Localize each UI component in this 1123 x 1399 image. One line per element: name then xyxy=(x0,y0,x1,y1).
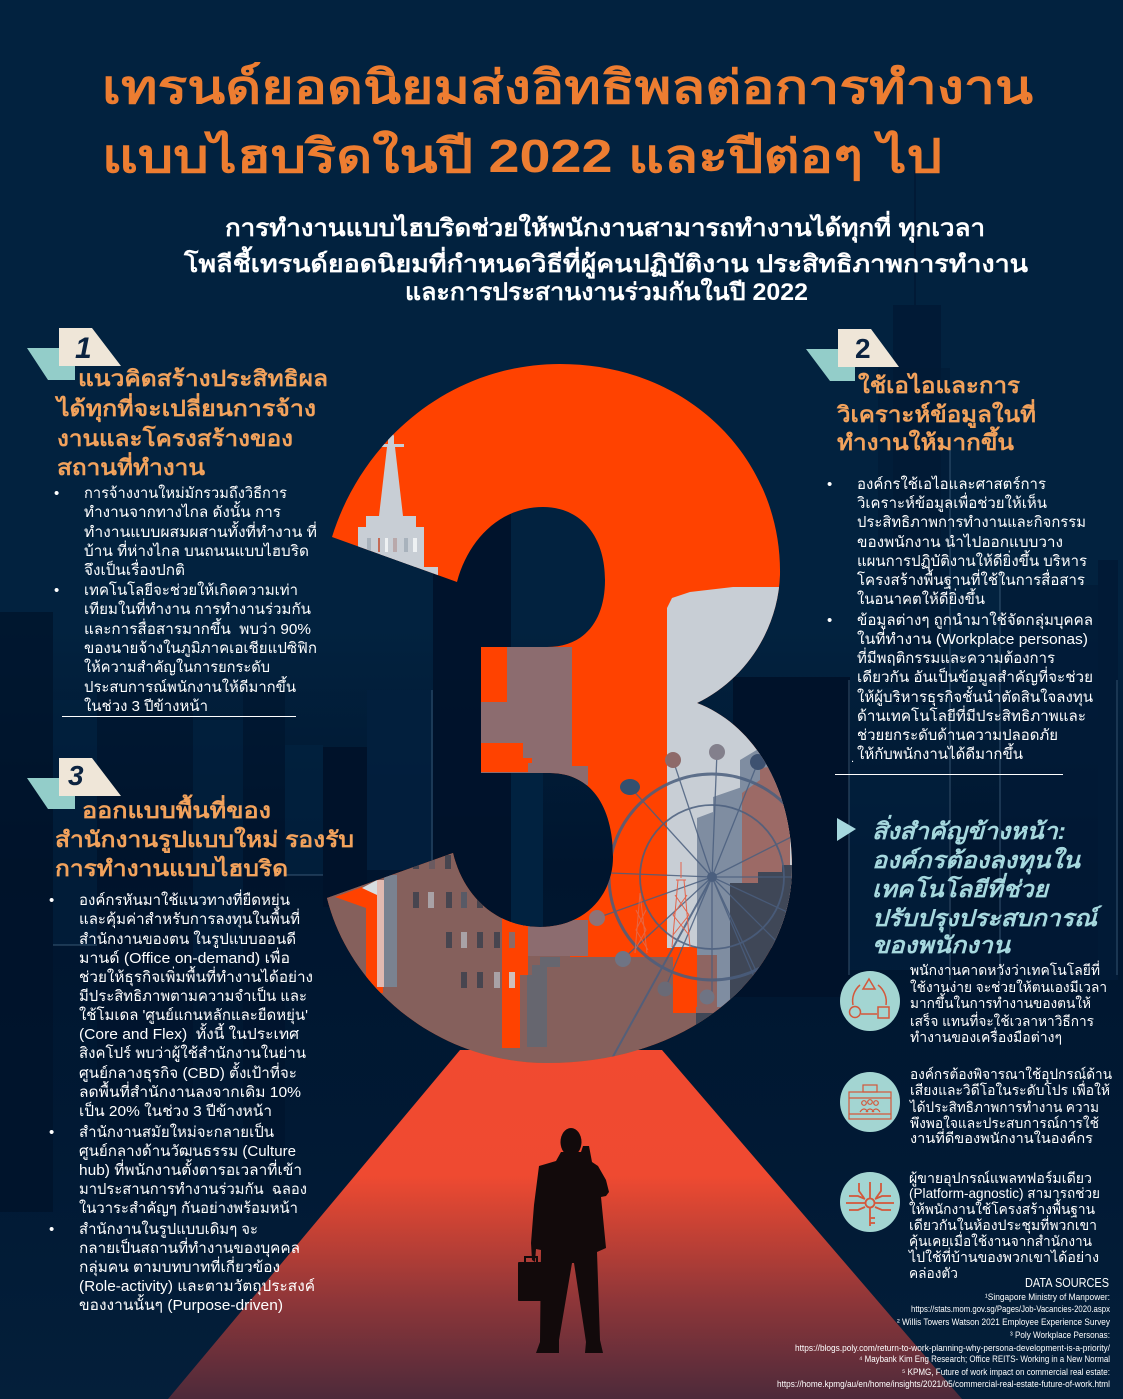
subtitle: การทำงานแบบไฮบริดช่วยให้พนักงานสามารถทำงานได้ทุกที่ ทุกเวลา xyxy=(225,210,985,244)
body text 2: . xyxy=(851,753,854,765)
right side buildings xyxy=(697,787,742,1010)
badge 1: 1 xyxy=(75,332,92,365)
tech text 1 xyxy=(910,961,1107,1045)
tech text 1: ทำงานของเครื่องมือต่างๆ xyxy=(910,1028,1062,1045)
data sources: ¹Singapore Ministry of Manpower: xyxy=(985,1292,1110,1302)
body text 3: ในวาระสำคัญๆ กันอย่างพร้อมหน้า xyxy=(79,1199,298,1217)
silhouette: businessman with briefcase xyxy=(518,1128,609,1353)
what's next heading: สิ่งสำคัญข้างหน้า: xyxy=(872,814,1066,845)
body text 3: มานด์ (Office on-demand) เพื่อ xyxy=(79,947,290,967)
body text 2: ช่วยยกระดับด้านความปลอดภัย xyxy=(857,727,1058,744)
body text 1: ทำงานจากทางไกล ดังนั้น การ xyxy=(84,501,281,521)
tech text 1: เสร็จ แทนที่จะใช้เวลาหาวิธีการ xyxy=(910,1012,1094,1029)
body text 2: องค์กรใช้เอไอและศาสตร์การ xyxy=(857,475,1046,493)
grey building right xyxy=(667,587,800,948)
tech text 1: มากขึ้นในการทำงานของตนให้ xyxy=(910,993,1091,1011)
body text 1: จึงเป็นเรื่องปกติ xyxy=(84,559,185,579)
badge 2 xyxy=(806,329,899,381)
data sources: DATA SOURCES xyxy=(1025,1276,1109,1290)
windows xyxy=(413,855,515,988)
what's next heading: เทคโนโลยีที่ช่วย xyxy=(872,872,1051,902)
body text 3: • xyxy=(49,892,54,909)
tech text 2: องค์กรต้องพิจารณาใช้อุปกรณ์ด้าน xyxy=(910,1066,1112,1083)
data sources: ³ Poly Workplace Personas: xyxy=(1010,1330,1110,1340)
big number 3 with city xyxy=(320,360,815,1073)
background skyline xyxy=(0,170,1118,1212)
body text 2: ด้านเทคโนโลยีที่มีประสิทธิภาพและ xyxy=(857,705,1086,725)
body text 3: สำนักงานในรูปแบบเดิมๆ จะ xyxy=(79,1220,258,1238)
heading 1: ได้ทุกที่จะเปลี่ยนการจ้าง xyxy=(55,392,316,423)
body text 3: (Role-activity) และตามวัตถุประสงค์ xyxy=(79,1278,315,1296)
heading 1 xyxy=(55,366,328,480)
what's next heading: ของพนักงาน xyxy=(872,932,1011,958)
title: เทรนด์ยอดนิยมส่งอิทธิพลต่อการทำงาน xyxy=(102,61,1034,113)
body text 3: เป็น 20% ในช่วง 3 ปีข้างหน้า xyxy=(79,1101,272,1120)
body text 3: และคุ้มค่าสำหรับการลงทุนในพื้นที่ xyxy=(79,908,300,929)
body text 2: ของพนักงาน นำไปออกแบบวาง xyxy=(857,533,1063,551)
arrow: triangle xyxy=(837,818,856,841)
body text 3: องค์กรหันมาใช้แนวทางที่ยืดหยุ่น xyxy=(79,889,290,910)
panel: trend 1 xyxy=(27,328,328,716)
body text 2: • xyxy=(827,612,832,629)
tech text 3 xyxy=(908,1170,1100,1281)
tech text 2: พึงพอใจและประสบการณ์การใช้ xyxy=(910,1115,1099,1131)
tech text 3: ไปใช้ที่บ้านของพวกเขาได้อย่าง xyxy=(908,1248,1099,1265)
body text 2: ที่มีพฤติกรรมและความต้องการ xyxy=(857,647,1055,667)
body text 3: สิงคโปร์ พบว่าผู้ใช้สำนักงานในย่าน xyxy=(79,1044,306,1062)
subtitle: โพลีชี้เทรนด์ยอดนิยมที่กำหนดวิธีที่ผู้คนปฏิบัติงาน ประสิทธิภาพการทำงาน xyxy=(183,245,1029,279)
tech text 2: ได้ประสิทธิภาพการทำงาน ความ xyxy=(909,1099,1099,1115)
body text 2: แผนการปฏิบัติงานให้ดียิ่งขึ้น บริหาร xyxy=(857,550,1087,570)
body text 1: ประสบการณ์พนักงานให้ดีมากขึ้น xyxy=(84,676,296,696)
heading 2: ทำงานให้มากขึ้น xyxy=(837,426,1014,455)
tech text 3: คุ้นเคยเมื่อใช้งานจากสำนักงาน xyxy=(909,1232,1092,1250)
body text 3: (Core and Flex) ทั้งนี้ ในประเทศ xyxy=(79,1023,299,1043)
lower grey stair xyxy=(527,957,560,1047)
heading 3: การทำงานแบบไฮบริด xyxy=(55,855,288,881)
body text 2: ในที่ทำงาน (Workplace personas) xyxy=(857,628,1088,648)
body text 1: การจ้างงานใหม่มักรวมถึงวิธีการ xyxy=(84,484,287,502)
tech text 1: พนักงานคาดหวังว่าเทคโนโลยีที่ xyxy=(910,961,1100,978)
body text 3: ศูนย์กลางด้านวัฒนธรรม (Culture xyxy=(79,1143,296,1160)
heading 1: สถานที่ทำงาน xyxy=(57,451,205,480)
panel: trend 3 xyxy=(27,758,354,1314)
body text 3: ศูนย์กลางธุรกิจ (CBD) ตั้งเป้าที่จะ xyxy=(79,1062,297,1083)
body text 3: สำนักงานสมัยใหม่จะกลายเป็น xyxy=(79,1122,274,1141)
lower brown building xyxy=(327,853,766,1063)
subtitle: และการประสานงานร่วมกันในปี 2022 xyxy=(405,277,808,306)
body text 3: มีประสิทธิภาพตามความจำเป็น และ xyxy=(79,986,307,1005)
body text 3: ช่วยให้ธุรกิจเพิ่มพื้นที่ทำงานได้อย่าง xyxy=(79,966,313,987)
heading 1: แนวคิดสร้างประสิทธิผล xyxy=(78,366,328,391)
red road light beam xyxy=(168,1050,962,1399)
body text 2: วิเคราะห์ข้อมูลเพื่อช่วยให้เห็น xyxy=(856,492,1047,512)
what's next heading: ปรับปรุงประสบการณ์ xyxy=(872,905,1102,933)
central brown blocks xyxy=(481,647,588,785)
ferris wheel xyxy=(604,760,792,1057)
tech text 3: ผู้ขายอุปกรณ์แพลทฟอร์มเดียว xyxy=(909,1170,1092,1187)
panel: what's next xyxy=(837,814,1112,1281)
tech text 2: งานที่ดีของพนักงานในองค์กร xyxy=(910,1129,1093,1146)
title xyxy=(102,61,1034,182)
tech text 3: (Platform-agnostic) สามารถช่วย xyxy=(909,1185,1100,1201)
body text 3: สำนักงานของตน ในรูปแบบออนดี xyxy=(79,930,296,948)
what's next heading xyxy=(872,814,1102,958)
body text 3: มาประสานการทำงานร่วมกัน ฉลอง xyxy=(79,1181,307,1198)
body text 1: ของนายจ้างในภูมิภาคเอเชียแปซิฟิก xyxy=(84,639,317,657)
tech text 2: เสียงและวิดีโอในระดับโปร เพื่อให้ xyxy=(910,1081,1110,1098)
icon: circuit key xyxy=(840,1172,900,1232)
badge 3: 3 xyxy=(68,760,84,791)
body text 2: ให้ผู้บริหารธุรกิจชั้นนำตัดสินใจลงทุน xyxy=(857,686,1093,707)
panel: trend 2 xyxy=(806,329,1093,774)
heading 3 xyxy=(55,794,354,881)
body text 1: เทคโนโลยีจะช่วยให้เกิดความเท่า xyxy=(84,581,298,599)
heading 2: วิเคราะห์ข้อมูลในที่ xyxy=(836,398,1036,429)
body text 3: ของงานนั้นๆ (Purpose-driven) xyxy=(79,1294,283,1314)
body text 1: ทำงานแบบผสมผสานทั้งที่ทำงาน ที่ xyxy=(84,521,317,541)
title: แบบไฮบริดในปี 2022 และปีต่อๆ ไป xyxy=(102,129,942,182)
body text 1: เทียมในที่ทำงาน การทำงานร่วมกัน xyxy=(84,598,311,618)
body text 2: ให้กับพนักงานได้ดีมากขึ้น xyxy=(857,743,1023,763)
body text 1: และการสื่อสารมากขึ้น พบว่า 90% xyxy=(84,618,311,638)
tech text 1: ใช้งานง่าย จะช่วยให้ตนเองมีเวลา xyxy=(910,979,1107,995)
body text 1: • xyxy=(54,485,59,502)
heading 2: ใช้เอไอและการ xyxy=(858,372,1020,398)
body text 2: เดียวกัน อันเป็นข้อมูลสำคัญที่จะช่วย xyxy=(857,666,1093,686)
icon: shapes cycle xyxy=(840,971,900,1031)
body text 3: • xyxy=(49,1124,54,1141)
heading 2 xyxy=(836,372,1036,455)
body text 2 xyxy=(827,475,1093,765)
body text 1: ให้ความสำคัญในการยกระดับ xyxy=(84,658,270,676)
tech text 3: ให้พนักงานใช้โครงสร้างพื้นฐาน xyxy=(909,1199,1095,1218)
body text 2: ประสิทธิภาพการทำงานและกิจกรรม xyxy=(857,514,1086,531)
body text 3: ใช้โมเดล 'ศูนย์แกนหลักและยืดหยุ่น' xyxy=(79,1006,308,1025)
heading 3: ออกแบบพื้นที่ของ xyxy=(82,794,271,823)
body text 3 xyxy=(49,889,315,1314)
heading 3: สำนักงานรูปแบบใหม่ รองรับ xyxy=(55,826,354,854)
heading 1: งานและโครงสร้างของ xyxy=(57,425,293,451)
body text 2: ในอนาคตให้ดียิ่งขึ้น xyxy=(857,588,985,608)
body text 3: กลุ่มคน ตามบทบาทที่เกี่ยวข้อง xyxy=(79,1256,280,1277)
left wedge xyxy=(335,887,383,993)
what's next heading: องค์กรต้องลงทุนใน xyxy=(872,846,1081,875)
badge 2: 2 xyxy=(855,333,871,364)
tech text 3: เดียวกันในห้องประชุมที่พวกเขา xyxy=(909,1216,1097,1234)
tower xyxy=(366,434,416,567)
tech text 2 xyxy=(909,1066,1112,1146)
badge 3 xyxy=(27,758,121,809)
body text 2: • xyxy=(827,476,832,493)
body text 3: ลดพื้นที่สำนักงานลงจากเดิม 10% xyxy=(79,1081,301,1101)
body text 3: กลายเป็นสถานที่ทำงานของบุคคล xyxy=(79,1237,300,1258)
body text 3: hub) ที่พนักงานตั้งตารอเวลาที่เข้า xyxy=(79,1159,302,1179)
body text 1: ในช่วง 3 ปีข้างหน้า xyxy=(84,697,208,715)
badge 1 xyxy=(27,328,121,380)
body text 3: • xyxy=(49,1221,54,1238)
tech text 3: คล่องตัว xyxy=(909,1265,958,1281)
lattice towers xyxy=(672,862,690,947)
subtitle xyxy=(183,210,1029,306)
body text 2: โครงสร้างพื้นฐานที่ใช้ในการสื่อสาร xyxy=(857,569,1085,589)
body text 2: ข้อมูลต่างๆ ถูกนำมาใช้จัดกลุ่มบุคคล xyxy=(857,611,1093,630)
icon: video conference xyxy=(840,1072,900,1132)
body text 1: • xyxy=(54,582,59,599)
body text 1: บ้าน ที่ห่างไกล บนถนนแบบไฮบริด xyxy=(84,540,309,560)
data sources xyxy=(777,1276,1110,1389)
body text 1 xyxy=(54,484,317,715)
